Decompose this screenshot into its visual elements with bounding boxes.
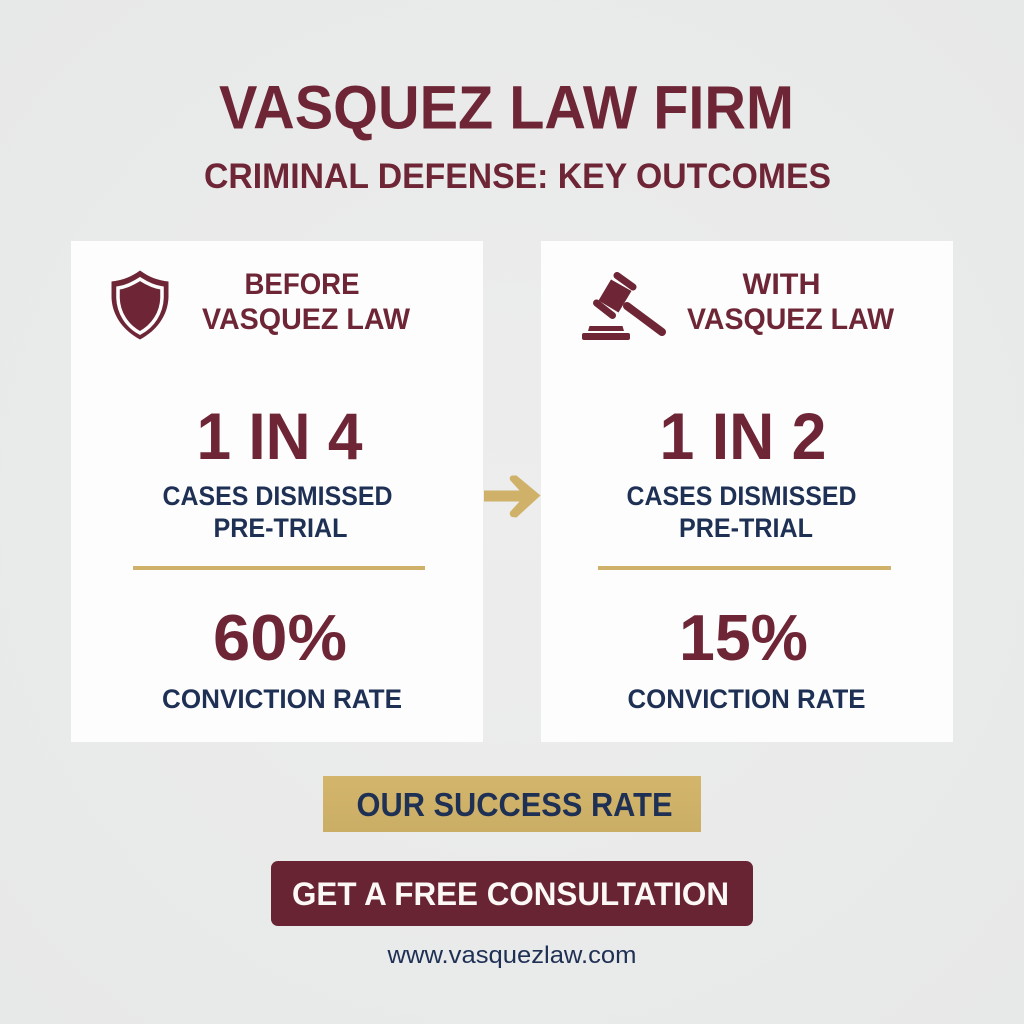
panel heading: VASQUEZ LAW: [687, 303, 894, 336]
panel heading: VASQUEZ LAW: [202, 303, 410, 336]
stat: 15%: 15%: [679, 601, 808, 674]
website url: www.vasquezlaw.com: [386, 942, 636, 969]
panel heading: WITH: [742, 268, 820, 301]
panel background: [541, 241, 953, 742]
arrow: [484, 476, 540, 518]
panel: before Vasquez Law: [71, 241, 483, 742]
button: get a free consultation: [271, 861, 753, 926]
panel: with Vasquez Law: [541, 241, 953, 742]
stat label: cases dismissed: CASES DISMISSED: [626, 481, 856, 511]
stat label: cases dismissed: [162, 481, 392, 543]
title: VASQUEZ LAW FIRM: [219, 74, 794, 142]
subtitle: CRIMINAL DEFENSE: KEY OUTCOMES: [204, 156, 831, 196]
panel heading: [687, 268, 894, 336]
panel heading: BEFORE: [244, 268, 360, 301]
stat: 1 in 4: 1 IN 4: [196, 399, 363, 473]
stat label: conviction rate: CONVICTION RATE: [628, 684, 866, 714]
stat label: cases dismissed: PRE-TRIAL: [679, 513, 813, 543]
stat: 60%: 60%: [213, 601, 347, 674]
stat label: cases dismissed: CASES DISMISSED: [162, 481, 392, 511]
button: get a free consultation: GET A FREE CONSULTATION: [292, 876, 729, 912]
icon: shield: [112, 270, 168, 340]
stat: 1 in 2: 1 IN 2: [660, 399, 826, 473]
badge: our success rate: OUR SUCCESS RATE: [356, 786, 672, 823]
icon: gavel: [582, 276, 662, 340]
badge: our success rate: [323, 776, 701, 832]
stat label: conviction rate: CONVICTION RATE: [162, 684, 402, 714]
stat label: cases dismissed: PRE-TRIAL: [214, 513, 348, 543]
panel background: [71, 241, 483, 742]
stat label: cases dismissed: [626, 481, 856, 543]
panel heading: [202, 268, 410, 336]
